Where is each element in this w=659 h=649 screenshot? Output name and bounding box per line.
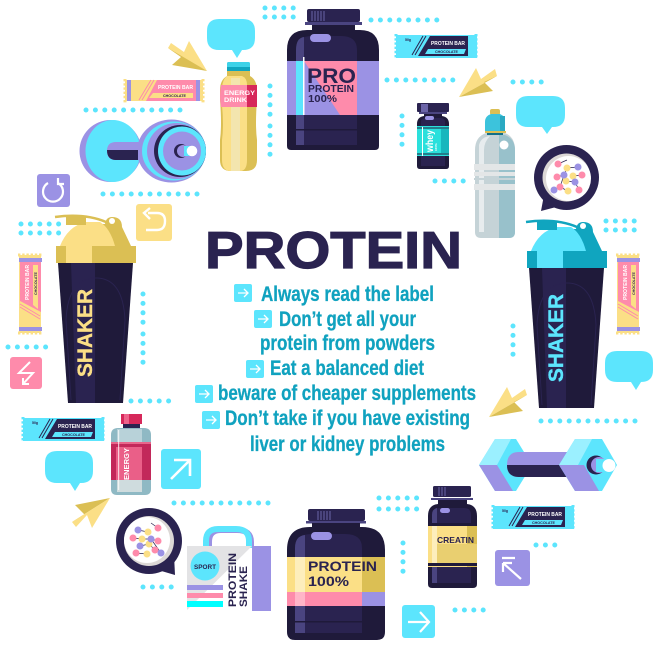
protein bar right vertical: PROTEIN BAR <box>623 265 629 300</box>
arrow top left <box>168 41 207 71</box>
protein bar lower left: PROTEIN BAR <box>58 424 92 430</box>
round speech protein molecule top <box>534 145 599 211</box>
protein bar top left <box>125 79 203 103</box>
bullet list <box>195 283 476 456</box>
protein bar lower left: 50g <box>32 421 38 425</box>
protein bar lower right <box>493 505 574 530</box>
protein bar left vertical: CHOCOLATE <box>34 271 38 295</box>
protein bar top left: CHOCOLATE <box>163 94 187 98</box>
shaker right teal: SHAKER <box>545 294 568 382</box>
energy bottle <box>111 414 151 495</box>
protein bar lower left <box>23 417 104 442</box>
bullet 2 <box>254 308 435 355</box>
large jar protein 100: 100% <box>308 573 350 589</box>
round speech protein molecule bottom <box>116 508 182 575</box>
bullet 5 <box>202 407 470 456</box>
large jar pro: PRO <box>307 65 356 88</box>
protein bar lower right: 50g <box>502 509 508 513</box>
shaker left yellow <box>55 216 136 403</box>
arrow lower right <box>489 387 527 417</box>
protein shake bag <box>187 529 271 611</box>
speech bubble right <box>516 96 565 134</box>
large jar protein 100: PROTEIN <box>308 558 377 574</box>
icon: undo square <box>37 174 70 207</box>
icon: north-west arrow square <box>495 550 530 586</box>
protein bar lower right: PROTEIN BAR <box>528 512 562 518</box>
shaker right teal <box>526 221 607 408</box>
energy drink bottle: ENERGY <box>224 90 256 97</box>
speech bubble right lower <box>605 351 653 390</box>
speech bubble top left <box>207 19 255 58</box>
energy drink bottle <box>220 62 257 171</box>
round dumbbell <box>80 120 206 182</box>
protein bar top right: PROTEIN BAR <box>431 41 465 47</box>
icon: right arrow square <box>402 605 435 638</box>
arrow top right <box>459 68 497 97</box>
bullet 2: Don’t get all your <box>279 308 416 331</box>
protein bar left vertical <box>18 255 43 333</box>
whey jar <box>417 103 449 169</box>
protein shake bag: SPORT <box>194 564 216 571</box>
protein bar right vertical: CHOCOLATE <box>632 271 636 295</box>
whey jar: whey <box>425 130 436 153</box>
icon: north-east arrow square <box>161 449 201 489</box>
protein shake bag: SHAKE <box>238 566 250 607</box>
title: PROTEIN <box>205 222 462 280</box>
protein bar top right: 50g <box>405 38 411 42</box>
large jar pro <box>287 9 379 150</box>
whey jar: 100% <box>434 143 438 151</box>
bullet 1: Always read the label <box>261 283 434 306</box>
protein shake bag: PROTEIN <box>227 553 239 607</box>
water bottle <box>474 109 515 238</box>
large jar pro: PROTEIN <box>308 84 354 95</box>
creatin jar <box>428 486 477 588</box>
bullet 2: protein from powders <box>260 332 435 355</box>
protein bar lower right: CHOCOLATE <box>532 521 556 525</box>
large jar protein 100 <box>287 509 385 640</box>
energy drink bottle: DRINK <box>224 97 247 104</box>
protein bar left vertical: PROTEIN BAR <box>25 265 31 300</box>
bullet 5: Don’t take if you have existing <box>225 407 470 430</box>
shaker left yellow: SHAKER <box>74 289 97 377</box>
protein bar top right <box>396 34 477 59</box>
protein bar right vertical <box>616 255 641 333</box>
protein bar lower left: CHOCOLATE <box>62 433 86 437</box>
bullet 5: liver or kidney problems <box>250 433 445 456</box>
protein bar top right: CHOCOLATE <box>435 50 459 54</box>
speech bubble lower left <box>45 451 93 491</box>
hexagonal dumbbell <box>479 439 617 491</box>
icon: lightning arrow square <box>10 357 42 389</box>
bullet 4: beware of cheaper supplements <box>218 382 476 405</box>
creatin jar: CREATIN <box>437 535 474 545</box>
icon: return square <box>136 204 172 241</box>
arrow lower left <box>72 498 110 528</box>
protein bar top left: PROTEIN BAR <box>158 85 193 91</box>
large jar pro: 100% <box>308 94 337 105</box>
energy bottle: ENERGY <box>124 448 131 480</box>
bullet 3: Eat a balanced diet <box>270 357 424 380</box>
